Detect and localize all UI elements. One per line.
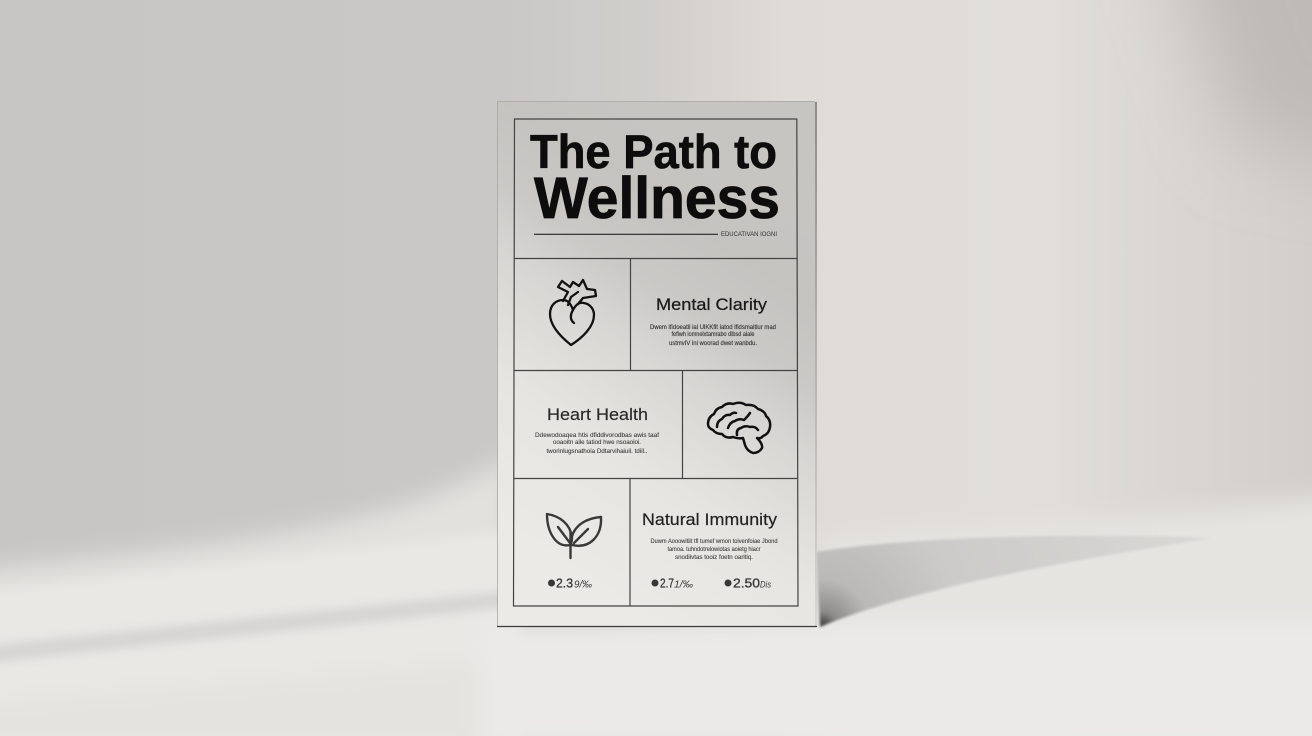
panel: brain icon — [708, 403, 770, 453]
body text: Dwem ifidoeatil ial UlKKfit iatod ifidsmaitiur mad — [650, 325, 776, 331]
body text: ooaoitn aile tatiod hwe nsoaoioi. — [553, 440, 641, 446]
subtitle caption: EDUCATIVAN IOGNI — [721, 232, 777, 238]
stat: 2.7: 1/‰ — [674, 580, 693, 590]
heading: Heart Health — [547, 405, 648, 424]
heading: Mental Clarity — [656, 295, 768, 314]
panel: plant icon — [547, 514, 601, 558]
stat: 2.7: 2.7 — [660, 576, 674, 590]
body text: Ddewodoaqea htis dfiddivorodbas awis taaf — [535, 433, 659, 439]
stat: 2.3: 2.3 — [556, 576, 573, 590]
stat: 2.3: 9/‰ — [574, 580, 592, 590]
body text: fefiwh iomnelxtamrabo dibsd aiale — [672, 332, 755, 338]
heading: The Path to: The Path to — [530, 125, 777, 178]
body text: snodiivtas tooiz foetn oaritiq. — [675, 555, 753, 561]
body text: tworinlugsnathoia Ddtarvihaiuil. tdiil.. — [546, 449, 648, 455]
cast shadow of the card — [816, 536, 1212, 627]
panel: heart icon — [550, 280, 596, 345]
card — [497, 101, 817, 627]
stat: 2.3 — [548, 576, 592, 590]
panel: Mental Clarity — [650, 295, 776, 347]
panel: Natural Immunity — [642, 510, 778, 561]
panel: Heart Health — [535, 405, 659, 455]
body text: ustmvIV ini woorad dwet wanbdu. — [669, 341, 757, 347]
panel: title — [530, 125, 780, 238]
body text — [650, 325, 776, 347]
stat: 2.7 — [652, 576, 693, 590]
subtitle rule — [534, 234, 718, 235]
body text — [535, 433, 659, 455]
stat: 2.50: Dis — [760, 580, 771, 590]
heading: Wellness: Wellness — [534, 166, 780, 231]
stat: 2.50 — [724, 576, 771, 590]
heading: Natural Immunity — [642, 510, 778, 529]
panel frame and grid — [514, 119, 798, 606]
stat: 2.50: 2.50 — [733, 576, 760, 590]
body text — [650, 539, 778, 561]
body text: tamoa. tuhndotrelowiotas aoietg hiacr — [668, 547, 760, 553]
body text: Duwm Aooowitiit tfl tumef wmon toivenfoiae Jbond — [650, 539, 778, 545]
